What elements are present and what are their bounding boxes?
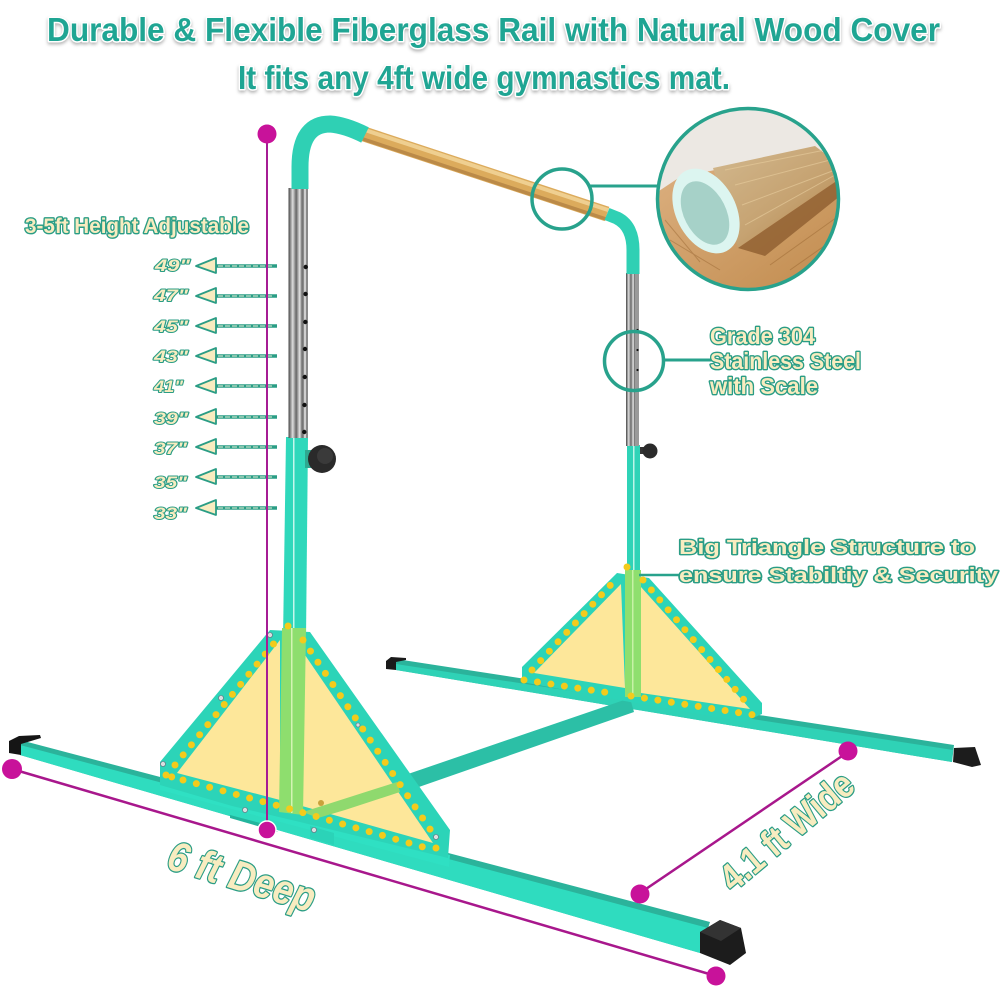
height scale labels: 43"	[153, 347, 189, 366]
wood rail	[363, 130, 608, 219]
height scale labels: 47"	[153, 286, 189, 305]
title: It fits any 4ft wide gymnastics mat.	[238, 59, 730, 96]
depth label: 6 ft Deep	[162, 832, 321, 921]
cross bar	[408, 698, 634, 788]
callout text	[679, 537, 999, 587]
left teal bend	[300, 124, 365, 189]
knob	[305, 445, 336, 473]
callout leader	[664, 358, 712, 362]
callout leader	[590, 184, 658, 188]
callout text: Big Triangle Structure to	[679, 537, 975, 559]
callout text: with Scale	[709, 373, 818, 399]
height scale labels: 45"	[153, 317, 189, 336]
front base rail	[9, 735, 746, 965]
height scale labels	[153, 256, 191, 523]
title	[47, 11, 940, 96]
width label: 4.1 ft Wide	[712, 764, 863, 900]
width dimension line	[630, 742, 858, 904]
front upright post	[283, 437, 308, 640]
front left end cap	[9, 735, 41, 755]
callout leader	[639, 574, 682, 576]
callout text: Stainless Steel	[710, 348, 861, 374]
right teal bend	[607, 214, 633, 274]
front sleeve plates	[230, 815, 278, 832]
upper bar	[288, 124, 639, 473]
rear knob	[640, 444, 658, 458]
height heading: 3-5ft Height Adjustable	[25, 215, 249, 238]
triangle structure callout	[639, 537, 999, 587]
magnified rail cross-section	[656, 106, 840, 292]
height scale labels: 33"	[154, 504, 188, 523]
rear left end cap	[386, 657, 406, 670]
stainless steel callout	[604, 323, 861, 399]
rear base rail	[386, 657, 981, 767]
fiberglass callout	[532, 100, 850, 300]
height scale arrows	[196, 258, 277, 515]
height dimension line	[258, 124, 276, 839]
height scale labels: 39"	[154, 409, 189, 428]
left chrome upright	[288, 188, 308, 438]
height scale labels: 35"	[154, 473, 188, 492]
front triangle bead outline	[166, 626, 441, 849]
height scale labels: 41"	[153, 377, 184, 396]
callout text	[709, 323, 861, 399]
front triangle frame	[160, 626, 450, 858]
callout ring on upright	[604, 332, 664, 390]
depth dimension line	[2, 759, 726, 986]
rear right end cap	[953, 747, 981, 767]
rear triangle bead outline	[524, 567, 754, 715]
front right end cap	[700, 920, 746, 965]
rear upright post	[627, 444, 658, 570]
callout text: ensure Stabiltiy & Security	[679, 565, 999, 587]
callout text: Grade 304	[710, 323, 815, 349]
height scale labels: 49"	[154, 256, 191, 275]
rear triangle frame	[522, 567, 762, 722]
right chrome upright	[626, 273, 639, 446]
title: Durable & Flexible Fiberglass Rail with Natural Wood Cover	[47, 11, 940, 48]
height scale labels: 37"	[154, 439, 188, 458]
callout ring on rail	[532, 169, 592, 229]
frame screws	[160, 632, 438, 840]
